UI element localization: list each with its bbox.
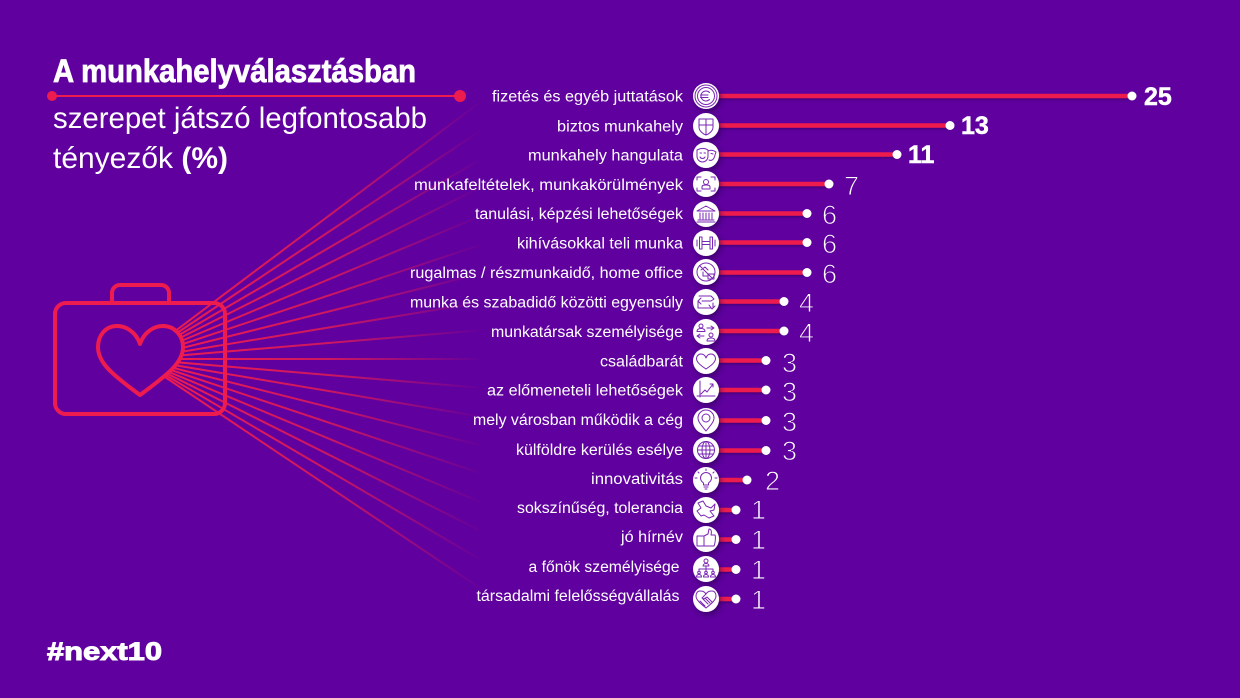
- icon: heart: [693, 348, 719, 374]
- labels: külföldre kerülés esélye: [516, 442, 683, 459]
- labels: munkatársak személyisége: [491, 324, 683, 341]
- bars: [715, 96, 1132, 599]
- values: 13: [961, 112, 989, 140]
- values: 7: [844, 171, 859, 201]
- icon: theatre masks: [693, 142, 719, 168]
- icon: person in frame: [693, 171, 719, 197]
- labels: munkafeltételek, munkakörülmények: [414, 177, 683, 194]
- labels: fizetés és egyéb juttatások: [492, 88, 683, 106]
- labels: társadalmi felelősségvállalás: [476, 588, 680, 605]
- values: 3: [782, 436, 797, 466]
- values: 3: [782, 377, 797, 407]
- title: [47, 53, 466, 175]
- icon: dumbbell: [693, 230, 719, 256]
- icon: growth chart: [693, 377, 719, 403]
- values: 6: [822, 229, 837, 259]
- icon: handshake heart: [693, 586, 719, 612]
- bar end dots: [732, 92, 1136, 604]
- icon: light bulb: [693, 467, 719, 493]
- icon: globe: [693, 437, 719, 463]
- icon: suitcase with heart: [55, 285, 225, 414]
- icon: euro coin: [693, 83, 719, 109]
- labels: munka és szabadidő közötti egyensúly: [410, 294, 683, 312]
- labels: innovativitás: [591, 471, 683, 488]
- labels: tanulási, képzési lehetőségek: [475, 206, 683, 223]
- icon: boss and team: [693, 556, 719, 582]
- values: 1: [751, 525, 766, 555]
- values: 3: [782, 348, 797, 378]
- values: 25: [1144, 83, 1172, 111]
- title: szerepet játszó legfontosabb: [53, 102, 427, 135]
- icon: thumbs up: [693, 526, 719, 552]
- labels: biztos munkahely: [557, 118, 683, 136]
- values: [751, 83, 1172, 615]
- icon: institution building: [693, 201, 719, 227]
- values: 4: [799, 318, 814, 348]
- labels: rugalmas / részmunkaidő, home office: [410, 265, 683, 282]
- logo: #next10: [47, 638, 162, 666]
- labels: a főnök személyisége: [528, 559, 680, 576]
- icon: diversity map: [693, 497, 719, 523]
- labels: munkahely hangulata: [528, 148, 683, 164]
- values: 6: [822, 259, 837, 289]
- values: 4: [799, 288, 814, 318]
- values: 1: [751, 585, 766, 615]
- icon: balance arrows: [693, 289, 719, 315]
- icon: shield: [693, 113, 719, 139]
- values: 11: [908, 141, 935, 169]
- title: tényezők (%): [53, 142, 228, 175]
- rays from heart to the list: [138, 100, 483, 590]
- labels: sokszínűség, tolerancia: [517, 500, 683, 517]
- icon: no commuting, home office: [693, 259, 719, 285]
- values: 1: [751, 555, 766, 585]
- icon: colleagues: [693, 319, 719, 345]
- labels: jó hírnév: [620, 529, 683, 546]
- labels: [410, 88, 684, 605]
- icon: location pin: [693, 408, 719, 434]
- labels: családbarát: [600, 354, 684, 370]
- title: A munkahelyválasztásban: [53, 53, 416, 89]
- values: 1: [751, 495, 766, 525]
- labels: kihívásokkal teli munka: [517, 236, 683, 252]
- values: 6: [822, 200, 837, 230]
- labels: az előmeneteli lehetőségek: [487, 382, 683, 400]
- values: 3: [782, 407, 797, 437]
- values: 2: [765, 466, 780, 496]
- labels: mely városban működik a cég: [473, 412, 683, 429]
